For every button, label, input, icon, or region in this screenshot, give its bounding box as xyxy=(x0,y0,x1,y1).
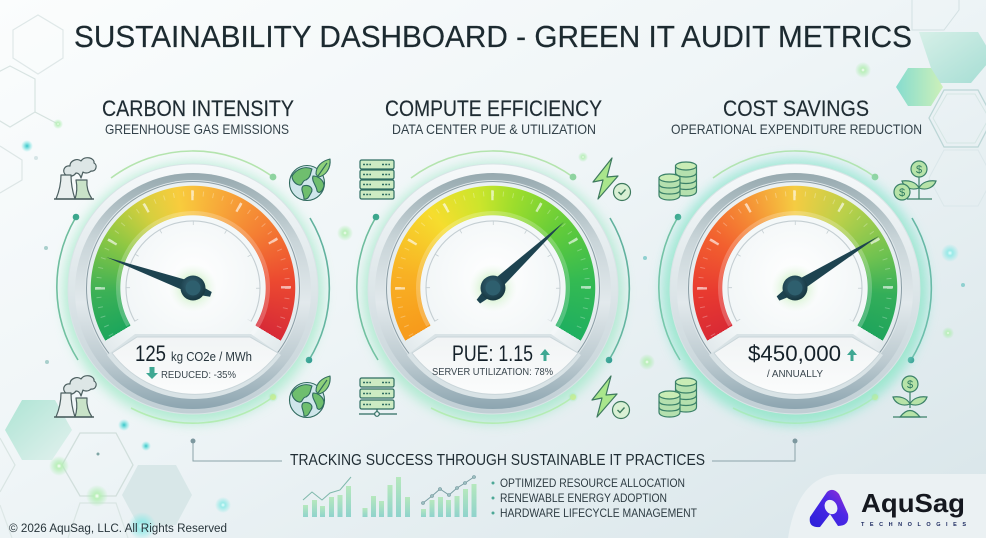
title: SUSTAINABILITY DASHBOARD - GREEN IT AUDIT METRICS xyxy=(74,19,912,54)
mini chart: bars and trend line xyxy=(421,476,476,517)
icon: bolt with check top xyxy=(593,158,630,200)
icon: aqusag logo xyxy=(810,490,848,527)
footer heading: TRACKING SUCCESS THROUGH SUSTAINABLE IT PRACTICES xyxy=(290,452,705,469)
icon: plant with coins top xyxy=(894,161,936,200)
reduced -35%: REDUCED: -35% xyxy=(161,369,236,381)
panel: carbon intensity xyxy=(54,96,330,423)
annually: / ANNUALLY xyxy=(767,368,823,380)
connector lines xyxy=(190,438,798,461)
heading: compute efficiency: COMPUTE EFFICIENCY xyxy=(385,96,602,121)
icon: plant with coin bottom: $ xyxy=(907,379,913,391)
heading: carbon intensity: CARBON INTENSITY xyxy=(102,96,294,121)
bullet list: OPTIMIZED RESOURCE ALLOCATION xyxy=(500,476,685,490)
gauge: cost savings xyxy=(659,151,931,424)
bullet list: HARDWARE LIFECYCLE MANAGEMENT xyxy=(500,506,698,520)
icon: globe top xyxy=(290,159,330,200)
value: 125 kg CO2e / MWh: 125 xyxy=(135,341,166,366)
bullet list xyxy=(492,476,698,520)
panel: cost savings xyxy=(659,96,936,424)
icon: factory top xyxy=(54,158,96,199)
icon: server rack top xyxy=(360,160,394,199)
icon: coins top xyxy=(659,162,696,200)
heading: cost savings: COST SAVINGS xyxy=(723,96,869,121)
icon: factory bottom xyxy=(54,376,96,417)
subheading: data center pue & utilization: DATA CENTER PUE & UTILIZATION xyxy=(392,121,596,137)
copyright: © 2026 AquSag, LLC. All Rights Reserved xyxy=(9,523,227,535)
icon: plant with coin bottom xyxy=(893,376,927,417)
value: $450,000: $450,000 xyxy=(748,341,841,366)
logo panel xyxy=(788,474,986,538)
hexagon pattern: top right xyxy=(896,0,986,206)
value: 125 kg CO2e / MWh xyxy=(135,341,252,366)
value: 125 kg CO2e / MWh: kg CO2e / MWh xyxy=(171,349,252,364)
value: PUE 1.15: PUE: 1.15 xyxy=(452,341,533,366)
subheading: greenhouse gas emissions: GREENHOUSE GAS EMISSIONS xyxy=(105,121,289,137)
bullet list: RENEWABLE ENERGY ADOPTION xyxy=(500,491,667,505)
icon: globe bottom xyxy=(290,376,330,418)
panel: compute efficiency xyxy=(357,96,630,423)
icon: server network bottom xyxy=(359,378,397,416)
hexagon pattern: bottom left xyxy=(0,400,192,538)
gauge: compute efficiency xyxy=(357,151,629,423)
reduced -35% xyxy=(146,367,236,381)
mini chart: line and bars xyxy=(303,477,351,517)
server utilization 78%: SERVER UTILIZATION: 78% xyxy=(432,366,553,378)
icon: bolt with check bottom xyxy=(592,376,630,418)
logo wordmark: AquSag xyxy=(861,488,965,518)
subheading: operational expenditure reduction: OPERATIONAL EXPENDITURE REDUCTION xyxy=(671,121,922,137)
gauge: carbon intensity xyxy=(57,151,329,423)
icon: plant with coins top: $ xyxy=(899,187,905,199)
icon: coins bottom xyxy=(659,378,696,417)
icon: plant with coins top: $ xyxy=(916,164,922,176)
hexagon pattern: top left xyxy=(0,15,63,193)
logo tagline: TECHNOLOGIES xyxy=(861,522,966,528)
mini chart: bars xyxy=(362,477,410,517)
